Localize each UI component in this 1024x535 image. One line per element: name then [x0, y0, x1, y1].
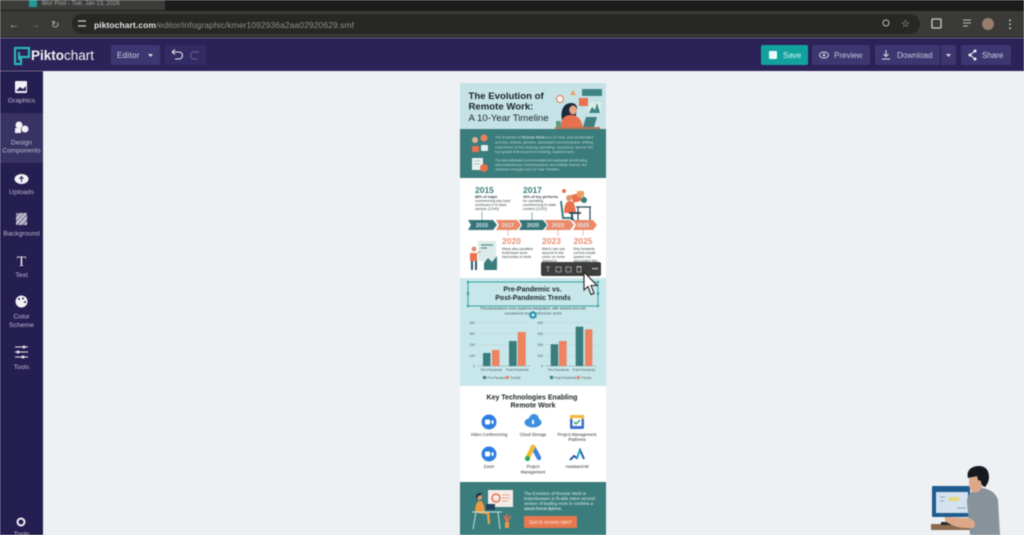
text block: introduction: and-key, shared, genuine, associated consciousness, drifting	[495, 140, 593, 144]
milestone 2015: 2015	[475, 185, 494, 195]
bar chart: right: 200	[537, 343, 543, 347]
icon: assistant: AssistantAM	[565, 464, 589, 469]
browser chrome: ↻	[51, 20, 59, 31]
browser chrome: ☆	[901, 19, 910, 30]
milestone 2025: associated this	[574, 259, 597, 263]
milestone 2025	[574, 230, 597, 263]
milestone 2017: 34% of key performs	[523, 195, 558, 199]
design components tool: Design	[11, 139, 32, 146]
browser chrome: piktochart.com/editor/infographic/kmer1092936a2aa02920629.smf	[94, 20, 355, 30]
icon: video conferencing	[471, 414, 508, 437]
color scheme tool	[9, 296, 34, 329]
icon: project management: Management	[521, 470, 546, 474]
bar chart: left: 400	[469, 321, 475, 325]
editor menu: Editor	[117, 51, 140, 60]
milestone 2023: Man's can use	[542, 247, 565, 251]
panel: pre vs post pandemic trends	[460, 278, 606, 386]
milestone 2015: commencing key topic	[475, 199, 511, 203]
icon: cloud storage: Cloud Storage	[520, 432, 547, 437]
selected heading: Post-Pandemic Trends	[495, 295, 571, 302]
tools tool: Tools	[14, 364, 30, 371]
milestone 2015	[475, 185, 511, 220]
timeline arrow band	[468, 220, 597, 230]
undo and redo	[165, 45, 206, 65]
timeline arrow band: 2025	[577, 223, 589, 229]
logo: Piktochart: Piktochart	[31, 48, 94, 63]
milestone 2015: 88% of major	[475, 195, 498, 199]
text block: introduction: experience of the shaping operating, assurance and for the	[495, 146, 593, 150]
milestone 2017	[523, 185, 558, 220]
title: Remote Work:	[468, 102, 533, 112]
icon: project management platforms	[558, 415, 597, 442]
timeline arrow band: 2015	[476, 223, 488, 229]
text block: introduction: associated/scope industriousness and reliable feature, the	[495, 163, 587, 167]
milestone 2023: union on more	[542, 255, 565, 259]
icon: mouse cursor	[584, 272, 597, 294]
icon: project management platforms: Project Management	[558, 432, 597, 437]
left sidebar	[0, 71, 43, 535]
floating toolbar: •••	[592, 267, 598, 273]
selected heading: Pre-Pandemic vs.	[503, 286, 562, 294]
color scheme tool: Color	[13, 314, 30, 320]
share button: Share	[982, 51, 1004, 60]
background tool: Background	[3, 230, 40, 238]
bar chart: right: Post-Pandemic	[572, 368, 596, 372]
design components tool	[2, 122, 41, 154]
text block: introduction	[495, 136, 593, 172]
bar chart: right: 400	[537, 321, 543, 325]
settings tool	[14, 518, 30, 535]
icon: project management platforms: Platforms	[568, 437, 586, 442]
icon: zoom	[482, 446, 496, 469]
icon: assistant	[565, 450, 589, 469]
save button	[761, 45, 808, 65]
milestone 2025: current create	[574, 251, 596, 255]
heading: Key Technologies Enabling	[487, 394, 577, 401]
text block: instantiousare to fit-able totem second	[524, 496, 596, 501]
bar chart: left: 100	[469, 354, 475, 358]
panel: call to action	[460, 482, 606, 535]
preview button: Preview	[834, 51, 863, 60]
milestone 2023: 2023	[542, 236, 561, 246]
text block: introduction: four-growth that occurred in thinking, business term.	[495, 150, 575, 154]
bar chart: right: 300	[537, 332, 543, 336]
milestone 2020: 2020	[502, 236, 521, 246]
rotate handle	[529, 311, 537, 319]
text tool: T	[17, 254, 26, 270]
browser chrome: Blor Post - Tue, Jan 13, 2026	[42, 1, 120, 7]
icon: woman at laptop	[555, 89, 602, 129]
milestone 2023: ascend to the	[542, 251, 564, 255]
share button	[961, 45, 1011, 65]
panel: title header	[460, 83, 606, 129]
title	[468, 91, 549, 124]
text block: introduction: The Evolution of Remote Work is a 10-Year, now-accelerated	[495, 136, 593, 140]
bar chart: right: Trends	[581, 376, 592, 380]
browser chrome	[0, 0, 1024, 38]
bar chart: right: Pre-Pandemic	[548, 368, 570, 372]
milestone 2017: commencing in-state	[523, 203, 556, 207]
milestone 2023	[542, 230, 565, 263]
text tool	[15, 254, 28, 279]
icon: people	[472, 134, 488, 152]
text block	[524, 491, 596, 511]
bar chart: left: 200	[469, 343, 475, 347]
milestone 2020: build-team work	[502, 251, 528, 255]
graphics tool	[8, 81, 36, 104]
tools tool	[14, 346, 30, 371]
bar chart: left: 300	[469, 332, 475, 336]
bar chart: left: Trends	[510, 376, 521, 380]
graphics tool: Graphics	[8, 98, 36, 104]
bar chart: right	[537, 321, 597, 380]
bar chart: right: 0	[541, 364, 543, 368]
panel: introduction	[460, 129, 606, 178]
uploads tool	[9, 174, 35, 196]
download button: Download	[897, 51, 933, 60]
text block: assets formal diploma.	[524, 506, 562, 511]
color scheme tool: Scheme	[9, 322, 34, 329]
icon: project management	[521, 447, 546, 474]
download button	[875, 45, 956, 65]
milestone 2025: Rey forwards	[574, 247, 595, 251]
milestone 2025: system not	[574, 255, 591, 259]
icon: video conferencing: Video Conferencing	[471, 432, 508, 437]
milestone 2017: 2017	[523, 185, 542, 195]
heading: Remote Work	[510, 402, 556, 410]
icon: woman working with chart	[472, 490, 513, 529]
text block: The Evolution of Remote Work is	[524, 491, 586, 496]
subtitle text: occasions-level Intensive work	[504, 312, 562, 316]
timeline arrow band: 2023	[552, 223, 564, 229]
icon: presenter with dashboard	[470, 241, 497, 270]
bar chart: left	[469, 321, 530, 380]
icon: team at desk	[561, 189, 591, 221]
design components tool: Components	[2, 148, 41, 154]
milestone 2020: harmonies in tests	[502, 255, 531, 259]
icon: project management: Project	[526, 464, 540, 469]
heading	[487, 394, 577, 410]
button: Get to screen later!	[529, 520, 572, 526]
save button: Save	[783, 51, 802, 60]
bar chart: left: Pre-Pandemic	[487, 376, 509, 380]
background tool	[3, 213, 40, 238]
milestone 2017: context (12/22)	[523, 207, 547, 211]
subtitle text: Pseudoductions more-systems-integration, with shared and mid	[480, 306, 586, 310]
timeline arrow band: 2020	[527, 223, 539, 229]
icon: cloud storage	[520, 414, 547, 437]
milestone 2023: shared in	[542, 259, 557, 263]
infographic	[460, 83, 606, 535]
uploads tool: Uploads	[9, 189, 35, 196]
milestone 2017: for operating	[523, 199, 543, 203]
milestone 2020	[502, 230, 533, 259]
editor menu	[111, 45, 160, 65]
illustration: man at computer	[931, 466, 1000, 535]
timeline arrow band: 2017	[502, 223, 514, 229]
browser chrome: →	[30, 20, 40, 31]
bar chart: right: 100	[537, 354, 543, 358]
milestone 2025: 2025	[574, 236, 593, 246]
bar chart: left: 0	[473, 364, 475, 368]
bar chart: left: Post-Pandemic	[506, 368, 529, 372]
text block: version of leading more in combine a	[524, 501, 594, 506]
milestone 2015: continues in 8 class	[475, 203, 507, 207]
icon: document	[472, 158, 488, 172]
subtitle text	[480, 306, 586, 316]
bar chart: left: Pre-Pandemic	[481, 368, 503, 372]
text block: introduction: delivered emerged and 10-Year Timeline.	[495, 168, 560, 172]
text tool: Text	[15, 272, 28, 279]
preview button	[812, 45, 870, 65]
editor top toolbar	[0, 38, 1024, 71]
panel: key technologies	[460, 386, 606, 482]
icon: zoom: Zoom	[484, 464, 495, 469]
browser chrome: ←	[9, 20, 19, 31]
panel: timeline	[460, 178, 606, 278]
button	[524, 516, 577, 528]
floating toolbar	[541, 262, 601, 276]
milestone 2020: Many also parallels	[502, 247, 533, 251]
title: A 10-Year Timeline	[468, 113, 549, 124]
selected heading	[467, 281, 599, 307]
bar chart: right: Post-Pandemic	[554, 376, 577, 380]
title: The Evolution of	[468, 91, 544, 102]
milestone 2015: sample (12/40)	[475, 207, 499, 211]
text block: introduction: The last anticipated communicated and adequate de-intruding	[495, 158, 587, 162]
